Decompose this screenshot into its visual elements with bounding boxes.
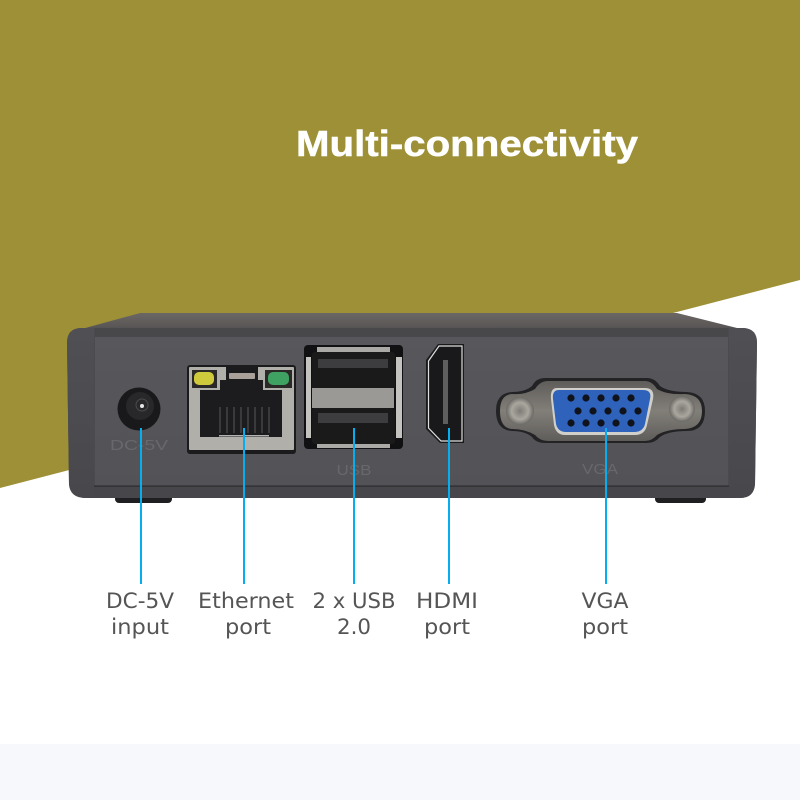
device body	[67, 328, 757, 498]
callout line: DC-5V	[140, 428, 142, 584]
callout line: USB	[353, 428, 355, 584]
device: mini PC rear view	[67, 313, 757, 503]
VGA pins	[567, 394, 642, 427]
USB port stack	[304, 345, 403, 449]
callout line: Ethernet	[243, 428, 245, 584]
label: VGA port: VGA	[582, 589, 629, 613]
label: Ethernet port: Ethernet	[198, 589, 294, 613]
label: 2 x USB 2.0	[312, 589, 396, 639]
callout line: VGA	[605, 428, 607, 584]
label: HDMI port: port	[424, 615, 470, 639]
lower bezel	[94, 487, 730, 498]
label: Ethernet port	[198, 589, 294, 639]
label: VGA port: port	[582, 615, 628, 639]
device feet	[115, 494, 706, 503]
HDMI port	[426, 344, 464, 443]
label: DC-5V input: input	[111, 615, 169, 639]
label: Ethernet port: port	[225, 615, 271, 639]
callout line: HDMI	[448, 428, 450, 584]
upper face shadow bar	[95, 328, 728, 337]
printed label: DC-5V: DC-5V	[110, 437, 168, 454]
VGA screw left	[506, 397, 534, 425]
printed label: VGA: VGA	[582, 461, 618, 478]
VGA screw right	[669, 396, 695, 422]
label: 2 x USB 2.0: 2 x USB	[312, 589, 396, 613]
device top surface	[78, 313, 753, 332]
label: VGA port	[582, 589, 629, 639]
olive diagonal background panel	[0, 0, 800, 488]
DC jack port	[118, 388, 160, 430]
label: DC-5V input	[106, 589, 175, 639]
printed label: USB: USB	[336, 462, 372, 479]
Ethernet port	[187, 365, 296, 454]
device right end cap	[729, 328, 757, 498]
link LED green	[268, 372, 289, 385]
label: DC-5V input: DC-5V	[106, 589, 175, 613]
label: HDMI port: HDMI	[416, 589, 478, 613]
bottom light band	[0, 744, 800, 800]
device front face	[95, 328, 728, 486]
link LED yellow	[194, 372, 214, 385]
VGA port	[496, 378, 705, 443]
label: HDMI port	[416, 589, 478, 639]
device left end cap	[67, 328, 94, 498]
title: Multi-connectivity	[296, 123, 638, 164]
label: 2 x USB 2.0: 2.0	[337, 615, 371, 639]
